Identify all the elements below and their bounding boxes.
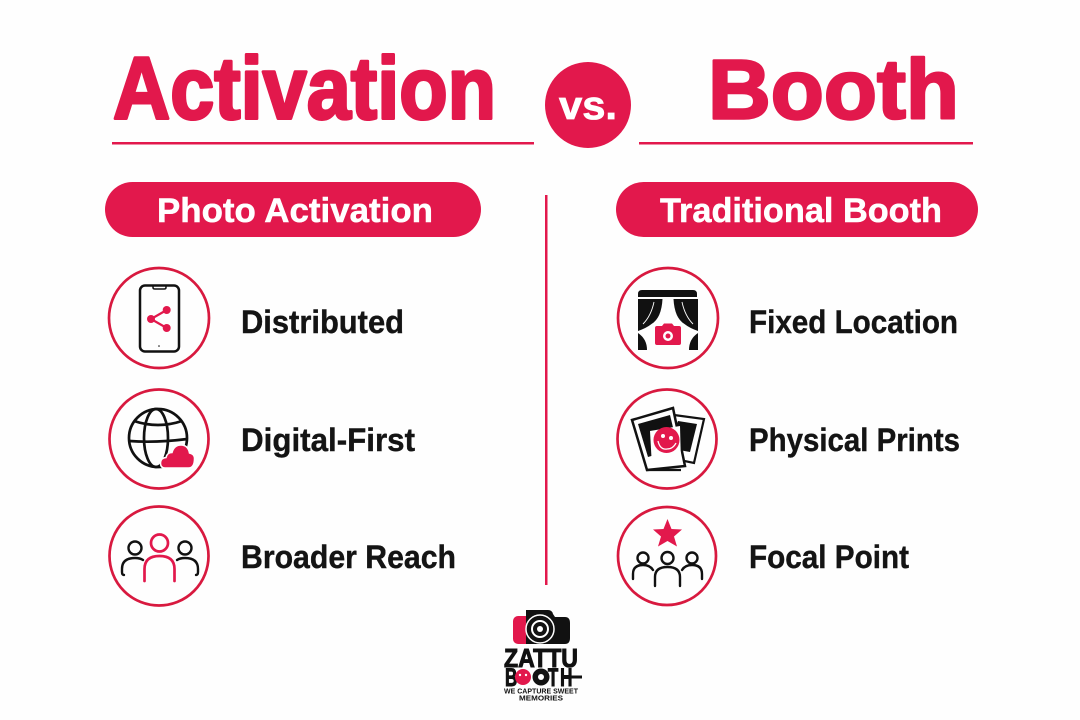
badge: vs.: vs.: [559, 84, 617, 128]
logo wordmark: ZATTU: [504, 643, 578, 673]
center divider line: [545, 195, 548, 585]
label: Focal Point: Focal Point: [749, 539, 909, 575]
icon: phone with share symbol: [109, 268, 209, 368]
badge: vs.: [545, 62, 631, 148]
heading pill: Traditional Booth: [616, 182, 978, 237]
icon: stack of photo prints with smiley: [618, 390, 716, 488]
heading pill: Photo Activation: Photo Activation: [157, 192, 433, 230]
logo wordmark second line: [505, 664, 582, 692]
logo wordmark second line: H: [560, 664, 572, 692]
panel: traditional booth: [616, 182, 978, 605]
heading pill: Photo Activation: [105, 182, 481, 237]
logo tagline: WE CAPTURE SWEET: [504, 686, 578, 696]
label: Physical Prints: Physical Prints: [749, 422, 960, 458]
label: Digital-First: Digital-First: [241, 422, 415, 458]
logo tagline second line: MEMORIES: [519, 694, 563, 702]
logo wordmark second line: T: [548, 664, 558, 692]
icon: stage curtain with camera: [618, 268, 718, 368]
heading pill: Traditional Booth: Traditional Booth: [660, 192, 942, 230]
label: Broader Reach: Broader Reach: [241, 539, 456, 575]
title: Activation: Activation: [113, 38, 496, 138]
logo: Zatu Booth: [504, 610, 582, 702]
logo wordmark second line: B: [505, 664, 517, 692]
icon: globe with cloud: [110, 390, 208, 488]
label: Distributed: Distributed: [241, 304, 404, 340]
icon: group of people: [110, 506, 208, 606]
title: Booth: Booth: [708, 42, 959, 136]
panel: photo activation: [105, 182, 481, 606]
label: Fixed Location: Fixed Location: [749, 304, 958, 340]
icon: star above group of people: [618, 507, 716, 605]
logo camera mark: [513, 610, 570, 644]
